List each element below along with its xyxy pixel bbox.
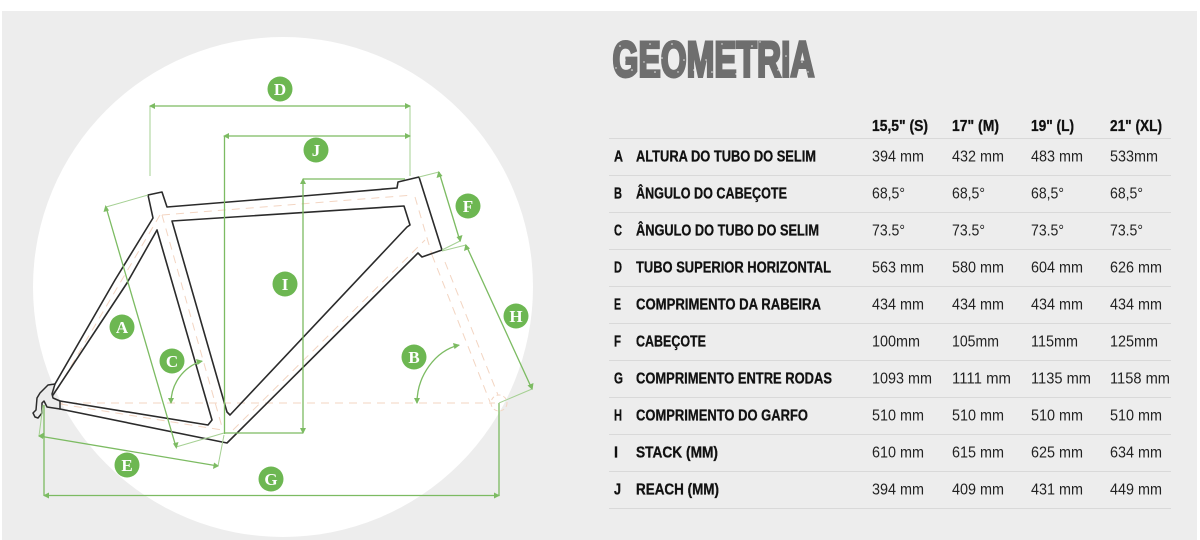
bubble G xyxy=(258,466,284,492)
row D: 563 mm xyxy=(872,260,924,276)
angle arc C xyxy=(168,359,203,404)
dimension D xyxy=(149,103,411,176)
bubble F: F xyxy=(463,197,473,216)
row C: ÂNGULO DO TUBO DO SELIM xyxy=(636,222,819,240)
row A: 533mm xyxy=(1110,148,1158,166)
row E: 434 mm xyxy=(1110,296,1162,314)
row J: 431 mm xyxy=(1031,482,1083,498)
bubble E xyxy=(114,452,140,478)
row D: 604 mm xyxy=(1031,260,1083,276)
row I: 634 mm xyxy=(1110,444,1162,462)
bubble F xyxy=(456,194,480,218)
bubble E: E xyxy=(121,456,133,475)
dimension J xyxy=(223,133,411,434)
table column headers xyxy=(872,118,1162,135)
row G: 1111 mm xyxy=(952,370,1011,388)
row F: 125mm xyxy=(1110,334,1158,350)
row H: 510 mm xyxy=(872,408,924,424)
row B: 68,5° xyxy=(952,186,985,202)
row B: 68,5° xyxy=(872,186,905,202)
white circle backdrop xyxy=(33,37,533,537)
bubble D: D xyxy=(274,80,286,99)
row D: TUBO SUPERIOR HORIZONTAL xyxy=(636,260,831,276)
row A: 394 mm xyxy=(872,148,924,166)
bubble H xyxy=(504,304,528,328)
bubble H: H xyxy=(509,307,523,326)
row G xyxy=(614,370,1170,388)
bubble A xyxy=(110,314,134,340)
dimension F xyxy=(419,171,462,250)
fork axle circle xyxy=(491,395,507,411)
row H: 510 mm xyxy=(952,408,1004,424)
row F: F xyxy=(614,334,621,350)
row H: H xyxy=(614,408,622,424)
dimension A xyxy=(104,195,224,449)
row J: 449 mm xyxy=(1110,482,1162,498)
row B: B xyxy=(614,186,622,202)
bubble I xyxy=(272,272,298,296)
dimension E xyxy=(38,405,224,469)
row D xyxy=(614,260,1162,276)
row J: J xyxy=(614,482,621,498)
row J: REACH (MM) xyxy=(636,482,719,498)
row B: 68,5° xyxy=(1031,186,1064,202)
row B: ÂNGULO DO CABEÇOTE xyxy=(636,184,787,202)
row I: I xyxy=(614,444,618,462)
row E: 434 mm xyxy=(1031,296,1083,314)
row D: 626 mm xyxy=(1110,260,1162,276)
row C: 73.5° xyxy=(872,222,905,240)
row J: 394 mm xyxy=(872,482,924,498)
row C: 73.5° xyxy=(1110,222,1143,240)
row D: 580 mm xyxy=(952,260,1004,276)
table column headers: 15,5" (S) xyxy=(872,118,928,135)
row A: 483 mm xyxy=(1031,148,1083,166)
row E: COMPRIMENTO DA RABEIRA xyxy=(636,296,821,314)
row G: 1158 mm xyxy=(1110,370,1170,388)
dimension G xyxy=(43,403,500,498)
bubble B xyxy=(402,344,426,370)
table column headers: 17" (M) xyxy=(952,118,999,135)
row E xyxy=(614,296,1162,314)
row F: 100mm xyxy=(872,334,920,350)
row G: 1135 mm xyxy=(1031,370,1091,388)
row E: E xyxy=(614,296,621,314)
table column headers: 19" (L) xyxy=(1031,118,1074,135)
row H xyxy=(614,408,1162,424)
bubble J xyxy=(304,138,328,162)
frame outer outline xyxy=(55,177,442,443)
row J: 409 mm xyxy=(952,482,1004,498)
angle arc B xyxy=(414,343,460,404)
row I: 615 mm xyxy=(952,444,1004,462)
bubble C xyxy=(160,348,184,374)
row H: 510 mm xyxy=(1031,408,1083,424)
dimension lines xyxy=(38,103,534,498)
bike frame diagram xyxy=(33,177,507,443)
row G: 1093 mm xyxy=(872,370,932,388)
row A: ALTURA DO TUBO DO SELIM xyxy=(636,148,816,166)
row G: COMPRIMENTO ENTRE RODAS xyxy=(636,370,832,388)
row C: C xyxy=(614,222,622,240)
bubble I: I xyxy=(282,275,289,294)
row I: 625 mm xyxy=(1031,444,1083,462)
frame centre lines xyxy=(55,195,498,430)
table column headers: 21" (XL) xyxy=(1110,118,1162,135)
frame inner top triangle xyxy=(172,206,410,415)
row A xyxy=(614,148,1158,166)
row A: 432 mm xyxy=(952,148,1004,166)
frame rear triangle xyxy=(53,230,212,425)
row D: D xyxy=(614,260,622,276)
row E: 434 mm xyxy=(952,296,1004,314)
row H: COMPRIMENTO DO GARFO xyxy=(636,408,808,424)
row C: 73.5° xyxy=(952,222,985,240)
row G: G xyxy=(614,370,623,388)
bubble J: J xyxy=(312,141,321,160)
row B: 68,5° xyxy=(1110,186,1143,202)
bubble G: G xyxy=(264,470,278,489)
dimension H xyxy=(442,244,534,403)
row F: CABEÇOTE xyxy=(636,334,706,350)
row I: STACK (MM) xyxy=(636,444,718,462)
row F: 115mm xyxy=(1031,334,1078,350)
row I xyxy=(614,444,1162,462)
row I: 610 mm xyxy=(872,444,924,462)
bubble A: A xyxy=(116,318,129,337)
row H: 510 mm xyxy=(1110,408,1162,424)
bubble B: B xyxy=(408,348,420,367)
row C: 73.5° xyxy=(1031,222,1064,240)
title: GEOMETRIA xyxy=(612,32,814,88)
row F: 105mm xyxy=(952,334,999,350)
row C xyxy=(614,222,1143,240)
row A: A xyxy=(614,148,623,166)
bubble C: C xyxy=(166,352,178,371)
row J xyxy=(614,482,1162,498)
dimension I xyxy=(224,178,405,434)
row B xyxy=(614,184,1143,202)
bubble D xyxy=(268,76,292,102)
row E: 434 mm xyxy=(872,296,924,314)
rear dropout xyxy=(33,384,60,418)
geometry table xyxy=(609,118,1171,508)
row F xyxy=(614,334,1158,350)
